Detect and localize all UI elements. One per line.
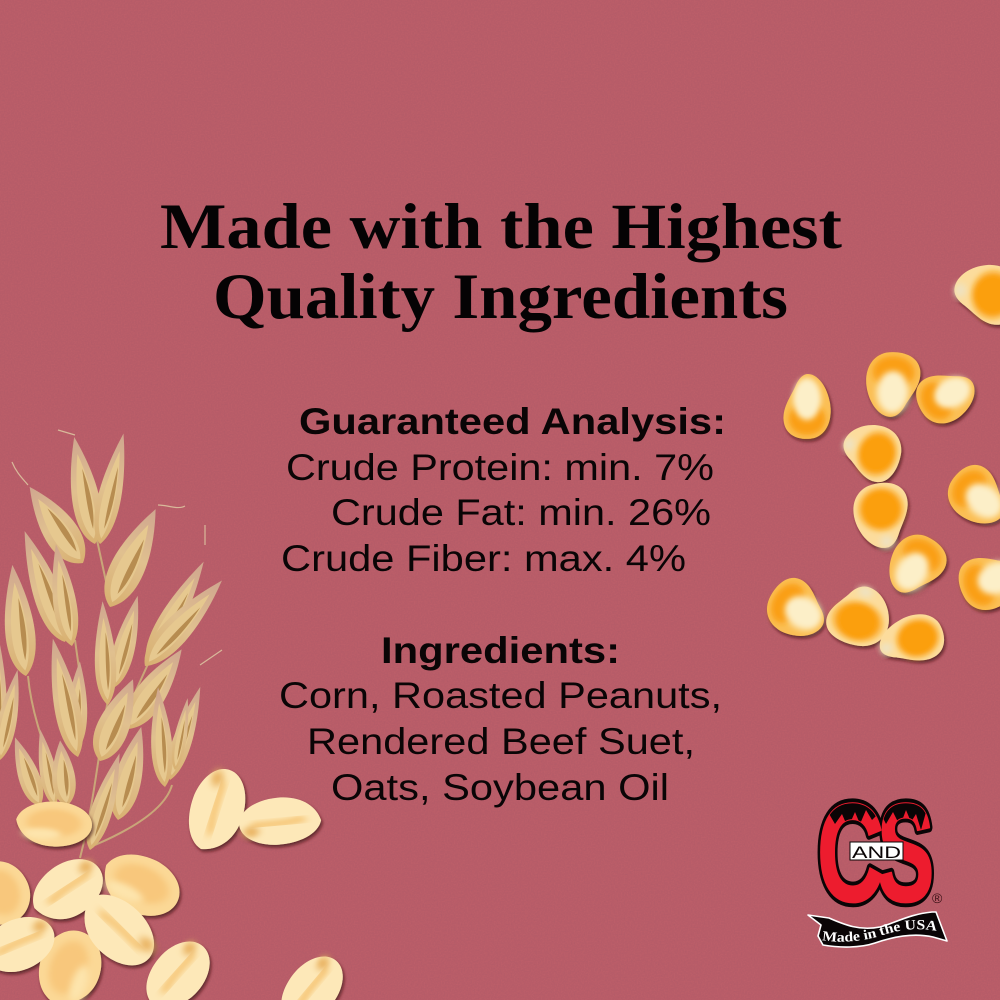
illustration: corn kernels [758, 260, 1000, 673]
text block: guaranteed analysis: Crude Fat: min. 26% [331, 492, 711, 533]
logo: C and S: S [877, 774, 934, 931]
text block: ingredients: Ingredients: [381, 630, 620, 671]
logo: made in the USA banner: Made in the USA [822, 920, 936, 942]
logo: C and S: C [817, 775, 884, 932]
title: Quality Ingredients [213, 261, 788, 333]
text block: guaranteed analysis: Crude Protein: min. 7% [286, 447, 714, 488]
logo: C and S: C [817, 775, 884, 932]
illustration: oat sprig [0, 430, 232, 858]
logo: AND box [850, 842, 903, 862]
text block: guaranteed analysis [281, 401, 726, 579]
logo: registered mark: ® [932, 890, 943, 906]
text block: ingredients: Rendered Beef Suet, [307, 721, 695, 762]
text block: guaranteed analysis: Crude Fiber: max. 4% [281, 538, 686, 579]
title [160, 191, 842, 333]
text block: guaranteed analysis: Guaranteed Analysis: [299, 401, 726, 442]
logo flames [830, 803, 926, 830]
text block: ingredients: Oats, Soybean Oil [331, 767, 669, 808]
logo: made in the USA banner [807, 911, 948, 948]
logo: C and S: S [877, 774, 934, 931]
text block: ingredients: Corn, Roasted Peanuts, [279, 675, 722, 716]
logo: C and S [807, 774, 948, 948]
text block: ingredients [279, 630, 722, 808]
logo: AND box: AND [852, 843, 901, 862]
title: Made with the Highest [160, 191, 842, 263]
illustration: peanuts [0, 762, 355, 1000]
